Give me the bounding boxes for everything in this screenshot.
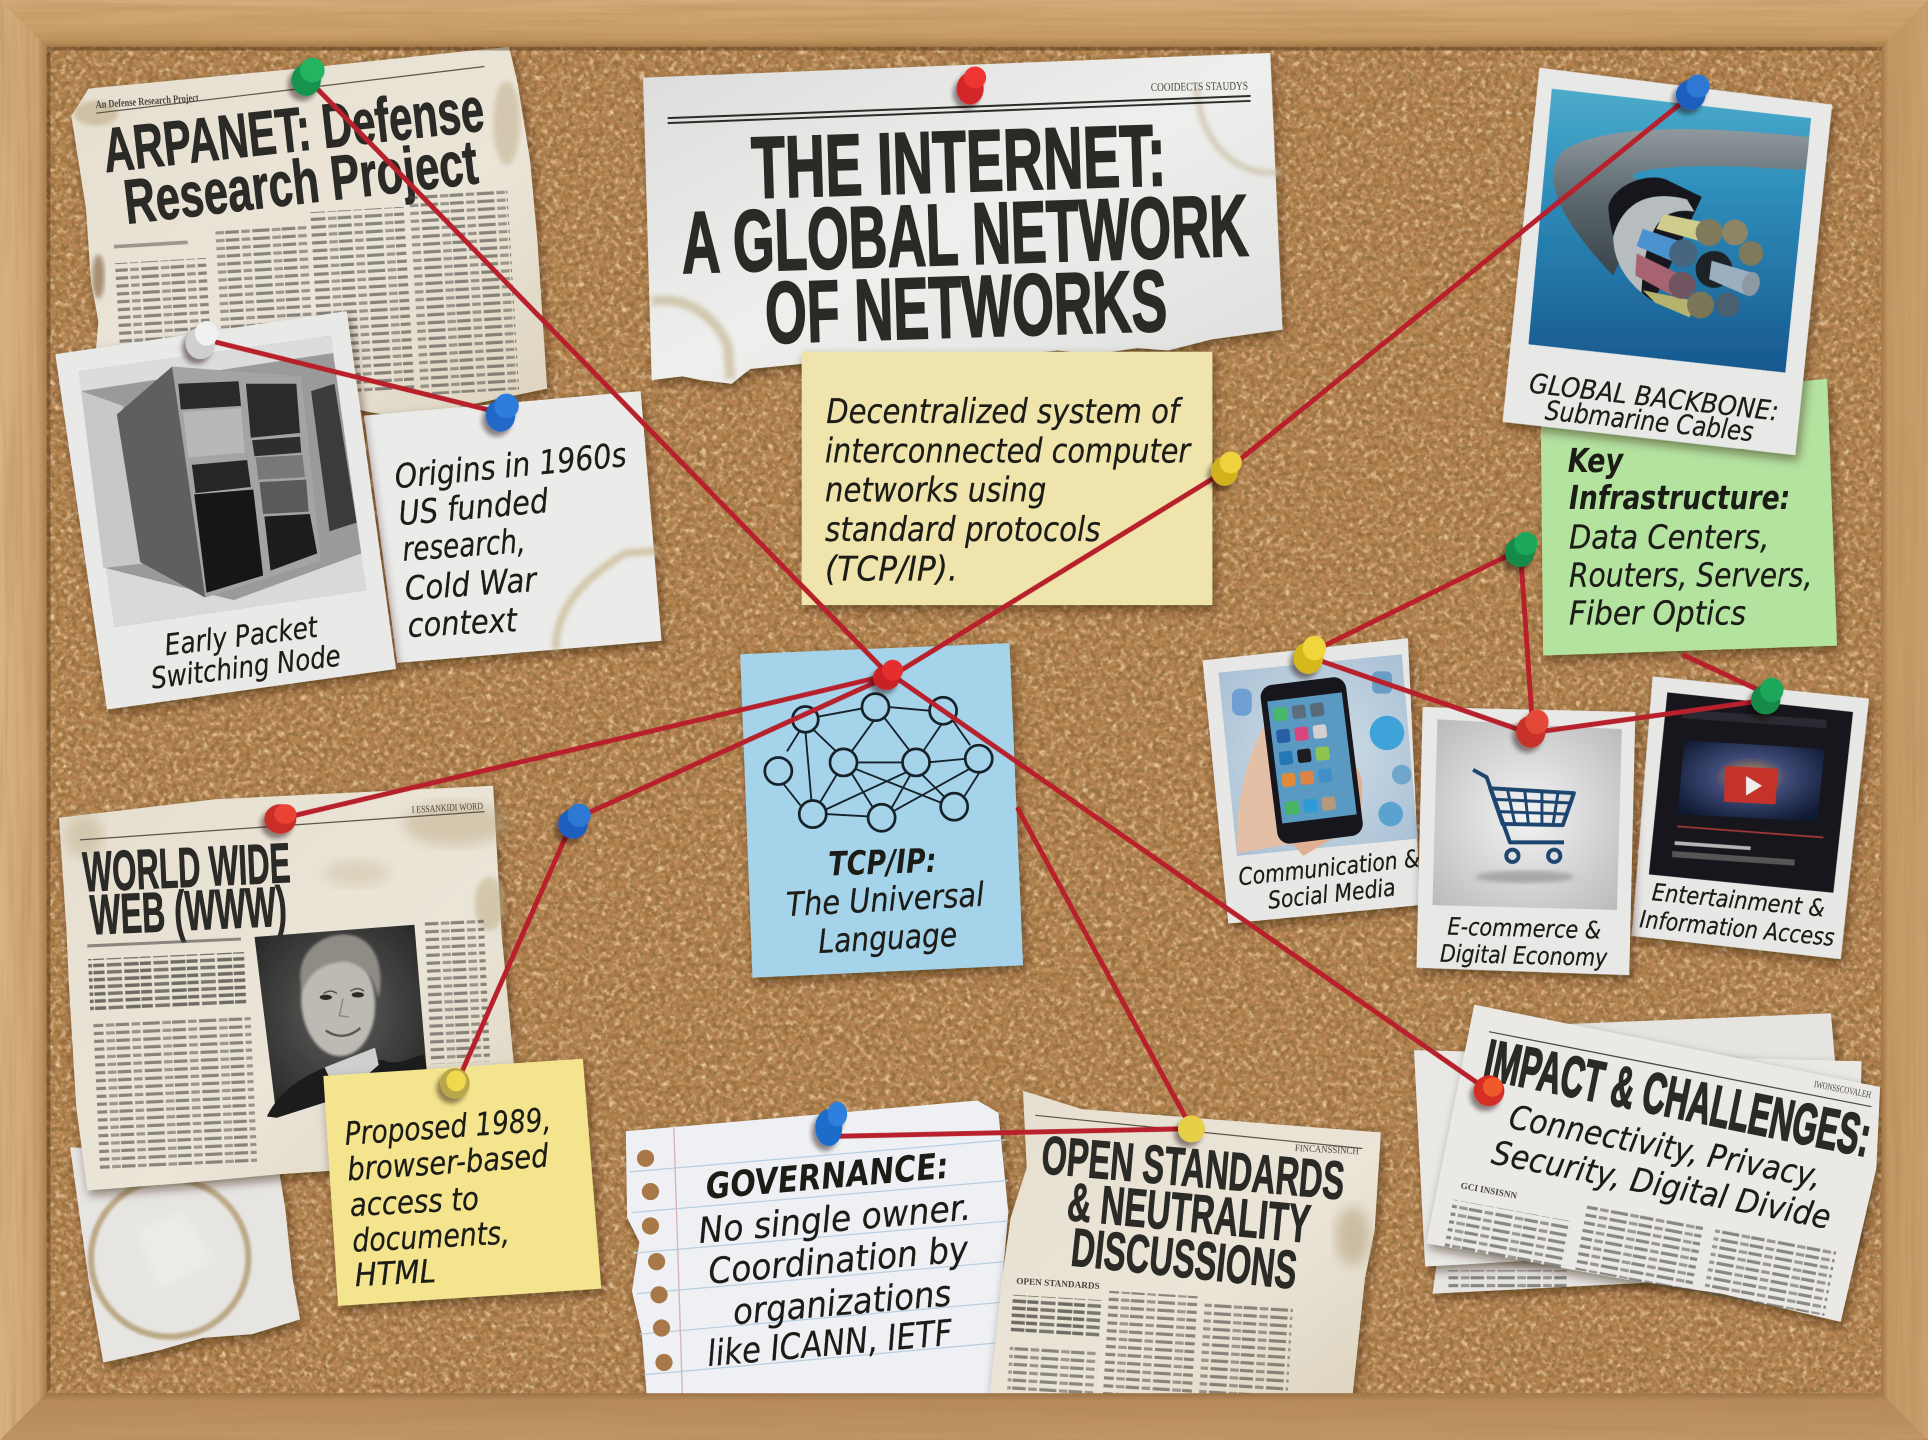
ARPANET headline: ARPANET: Defense	[100, 75, 487, 186]
photo: submarine cable	[1528, 89, 1817, 373]
polaroid: entertainment and information access	[1632, 676, 1869, 959]
article columns: GCI INSISNN	[1460, 1180, 1518, 1201]
note: origins in 1960s: Origins in 1960s	[393, 435, 628, 496]
yellow note: definition: networks using	[825, 471, 1046, 510]
note: origins in 1960s: US funded	[397, 481, 551, 533]
yellow note: proposed 1989: browser-based	[346, 1136, 550, 1188]
note text	[697, 1146, 972, 1375]
photo: shopping cart	[1432, 719, 1622, 910]
pin: infrastructure green	[1505, 532, 1538, 567]
caption: E-commerce &	[1447, 913, 1601, 945]
front sheet	[1426, 1005, 1880, 1322]
sub text: Security, Digital Divide	[1489, 1133, 1834, 1237]
yellow note: definition: interconnected computer	[825, 431, 1192, 470]
polaroid: early packet switching node	[55, 311, 396, 710]
sub text: Connectivity, Privacy,	[1506, 1097, 1825, 1196]
caption: Social Media	[1267, 873, 1397, 915]
pin: cable blue	[1676, 74, 1710, 110]
pin: WWW red	[264, 804, 296, 834]
photo: phone in hand	[1219, 654, 1418, 856]
ARPANET headline: Research Project	[120, 127, 481, 238]
headline: OPEN STANDARDS	[1039, 1125, 1347, 1212]
note: origins in 1960s	[364, 391, 662, 663]
note text: GOVERNANCE:	[704, 1146, 950, 1208]
small kicker: FINCANSSINCH	[1295, 1143, 1359, 1157]
note text: No single owner.	[697, 1188, 972, 1252]
yellow note: proposed 1989	[323, 1059, 601, 1306]
green note: key infrastructure: Infrastructure:	[1569, 478, 1790, 517]
yellow note: definition	[802, 352, 1212, 605]
sub text	[1489, 1097, 1834, 1237]
caption	[149, 610, 342, 696]
pin: title red	[957, 66, 986, 105]
pin: open standards yellow	[1178, 1115, 1205, 1142]
small kicker: COOIDECTS STAUDYS	[1151, 79, 1248, 94]
torn newspaper: ARPANET	[71, 47, 547, 418]
caption: Switching Node	[149, 639, 342, 696]
ARPANET small kicker: An Defense Research Project	[95, 92, 199, 111]
polaroid: e-commerce and digital economy	[1416, 707, 1635, 975]
yellow note: proposed 1989: Proposed 1989,	[343, 1100, 552, 1153]
pin: ARPANET green	[291, 58, 325, 96]
stacked newspapers: impact and challenges	[1414, 1005, 1880, 1322]
middle sheet	[1414, 1050, 1862, 1267]
caption: GLOBAL BACKBONE:	[1528, 368, 1780, 428]
green note: key infrastructure: Routers, Servers,	[1569, 556, 1812, 595]
ARPANET headline	[100, 75, 487, 238]
pin: connector blue	[558, 804, 591, 839]
headline: WEB (WWW)	[89, 875, 288, 947]
caption: Early Packet	[163, 610, 321, 662]
yellow note: proposed 1989: documents,	[351, 1214, 510, 1260]
back sheet	[1432, 1013, 1869, 1294]
main title	[680, 106, 1250, 362]
yellow note: proposed 1989: access to	[349, 1179, 480, 1224]
caption: Entertainment &	[1651, 878, 1826, 923]
main title: THE INTERNET:	[750, 106, 1167, 217]
pin: video green	[1751, 678, 1784, 714]
headline	[1039, 1125, 1347, 1301]
article columns	[1006, 1276, 1294, 1421]
yellow note: definition: Decentralized system of	[826, 392, 1184, 431]
green note: key infrastructure: Data Centers,	[1569, 517, 1769, 556]
caption	[1638, 878, 1836, 952]
pin: node white	[186, 321, 218, 359]
ARPANET article columns	[112, 188, 519, 413]
network diagram	[765, 694, 992, 831]
note text: like ICANN, IETF	[705, 1313, 954, 1375]
small kicker: IWONSSCOVALEH	[1813, 1079, 1872, 1101]
headline: WORLD WIDE	[81, 831, 292, 904]
note: origins in 1960s: context	[407, 600, 520, 645]
TCP/IP caption: The Universal	[785, 875, 986, 924]
headline: & NEUTRALITY	[1065, 1172, 1313, 1255]
red string network	[215, 84, 1761, 1136]
headline	[81, 831, 292, 947]
caption: Digital Economy	[1440, 940, 1608, 972]
small kicker: I ESSANKIDI WORD	[411, 801, 483, 816]
yellow note: definition: standard protocols	[825, 510, 1100, 549]
pin: origins blue	[486, 394, 519, 432]
photo: video player	[1649, 692, 1853, 893]
caption: Communication &	[1237, 844, 1421, 891]
TCP/IP caption: TCP/IP:	[828, 841, 937, 884]
polaroid: communication and social media	[1203, 638, 1421, 923]
article columns	[1444, 1178, 1837, 1318]
pin: social yellow	[1294, 636, 1326, 674]
note: origins in 1960s: research,	[401, 521, 527, 569]
title rules	[668, 96, 1250, 123]
caption	[1237, 844, 1421, 915]
polaroid: global backbone	[1503, 68, 1832, 455]
pin: e-commerce red	[1516, 710, 1549, 748]
blue note: TCP/IP	[740, 643, 1023, 978]
pin: impact red	[1474, 1075, 1504, 1106]
punched holes	[637, 1150, 673, 1371]
pin: center red	[873, 660, 903, 690]
note text: Coordination by	[707, 1229, 971, 1293]
main title: A GLOBAL NETWORK	[680, 176, 1250, 292]
note text: organizations	[731, 1273, 953, 1333]
portrait: Tim Berners-Lee	[255, 925, 427, 1118]
caption: Submarine Cables	[1544, 395, 1755, 448]
torn newspaper: open standards	[990, 1091, 1381, 1421]
TCP/IP caption	[785, 841, 986, 961]
yellow note: proposed 1989: HTML	[354, 1252, 437, 1294]
note: origins in 1960s: Cold War	[404, 560, 540, 608]
green note: key infrastructure: Key	[1568, 441, 1624, 480]
TCP/IP caption: Language	[817, 915, 958, 961]
article columns: OPEN STANDARDS	[1016, 1276, 1100, 1291]
title clipping	[643, 53, 1282, 384]
torn newspaper: World Wide Web	[59, 786, 514, 1190]
notebook paper: governance	[626, 1101, 1008, 1396]
article text	[87, 917, 494, 1170]
crumpled paper with coffee ring	[70, 1147, 300, 1362]
caption	[1440, 913, 1608, 972]
green note: key infrastructure	[1541, 379, 1837, 655]
green note: key infrastructure: Fiber Optics	[1569, 594, 1746, 633]
yellow note: definition: (TCP/IP).	[825, 549, 958, 588]
caption: Information Access	[1638, 905, 1836, 952]
headline: DISCUSSIONS	[1068, 1218, 1300, 1301]
main title: OF NETWORKS	[764, 252, 1169, 362]
cable core tubes	[1656, 214, 1701, 241]
pin: governance blue	[815, 1102, 847, 1146]
lower text on back sheets	[1448, 1270, 1566, 1289]
pin: proposed yellow	[440, 1068, 470, 1099]
photo: server cabinet	[79, 336, 366, 627]
pin: yellow on string	[1211, 451, 1242, 486]
